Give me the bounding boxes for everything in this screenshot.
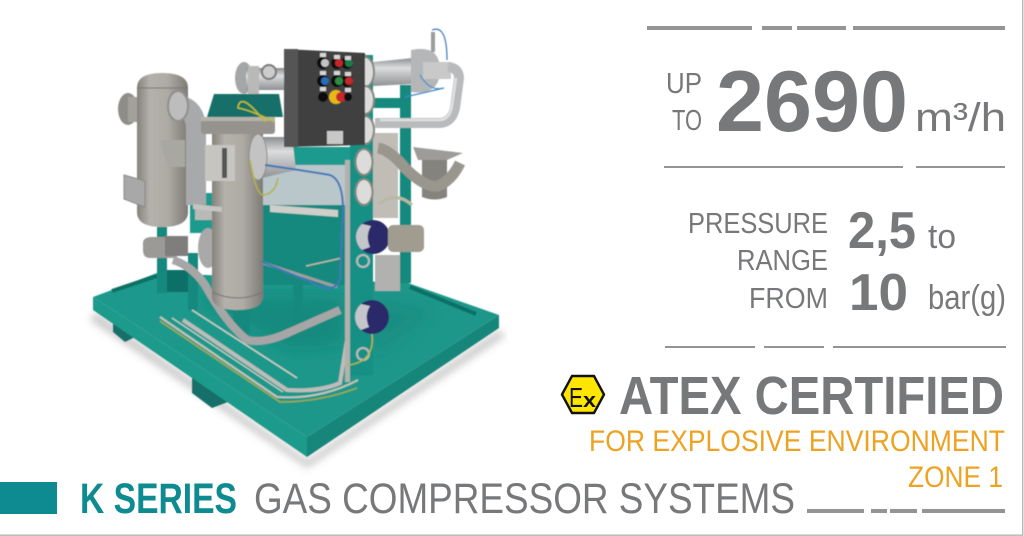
pressure sensors [348,220,390,365]
divider lines [665,346,1006,348]
flow rate stat [666,54,1006,150]
panel buttons [317,53,353,104]
icon: ATEX Ex hexagon: x [583,390,596,412]
up to label: UP [666,68,702,100]
explosive environment note [589,425,1005,494]
title: K SERIES [80,475,237,523]
pressure range stat: FROM [749,283,828,315]
central teal column [345,55,373,382]
control panel box [284,49,365,147]
filter vessel [193,117,275,310]
illustration: gas compressor skid [90,29,505,468]
compressor body [238,102,348,288]
pressure range stat: bar(g) [928,279,1006,317]
teal housing [207,94,283,117]
skid base plate [93,273,499,457]
side valve assembly [375,198,424,291]
explosive environment note: ZONE 1 [908,461,1003,494]
silencer and pipework [373,29,463,200]
teal title marker [0,482,57,514]
pressure label: PRESSURE [688,208,828,240]
gauges [356,57,374,205]
base shadow [90,312,505,468]
lower left inlet [143,236,340,341]
title [80,475,795,523]
elbow pipe [168,91,196,205]
cable tray [160,310,358,402]
pressure range stat: to [928,218,956,256]
rear frame [157,85,411,334]
skid feet [113,318,228,408]
flow rate unit: m³/h [915,96,1006,140]
left vessel [118,73,188,227]
flow rate stat: TO [672,105,702,137]
icon: ATEX Ex hexagon [562,376,604,413]
pressure range stat: RANGE [737,245,828,277]
title: GAS COMPRESSOR SYSTEMS [254,475,795,523]
pressure range stat: 10 [849,264,908,322]
top divider lines [647,26,1005,30]
divider lines [664,166,1005,168]
rear flange pipe [235,62,286,100]
pressure range stat [688,202,1006,322]
pressure values: 2,5 [848,202,916,260]
bottom divider lines [807,509,1005,513]
grey panel [373,133,398,218]
flow rate value: 2690 [716,54,908,150]
support bracket [195,208,223,268]
icon: ATEX Ex hexagon: E [569,382,583,413]
